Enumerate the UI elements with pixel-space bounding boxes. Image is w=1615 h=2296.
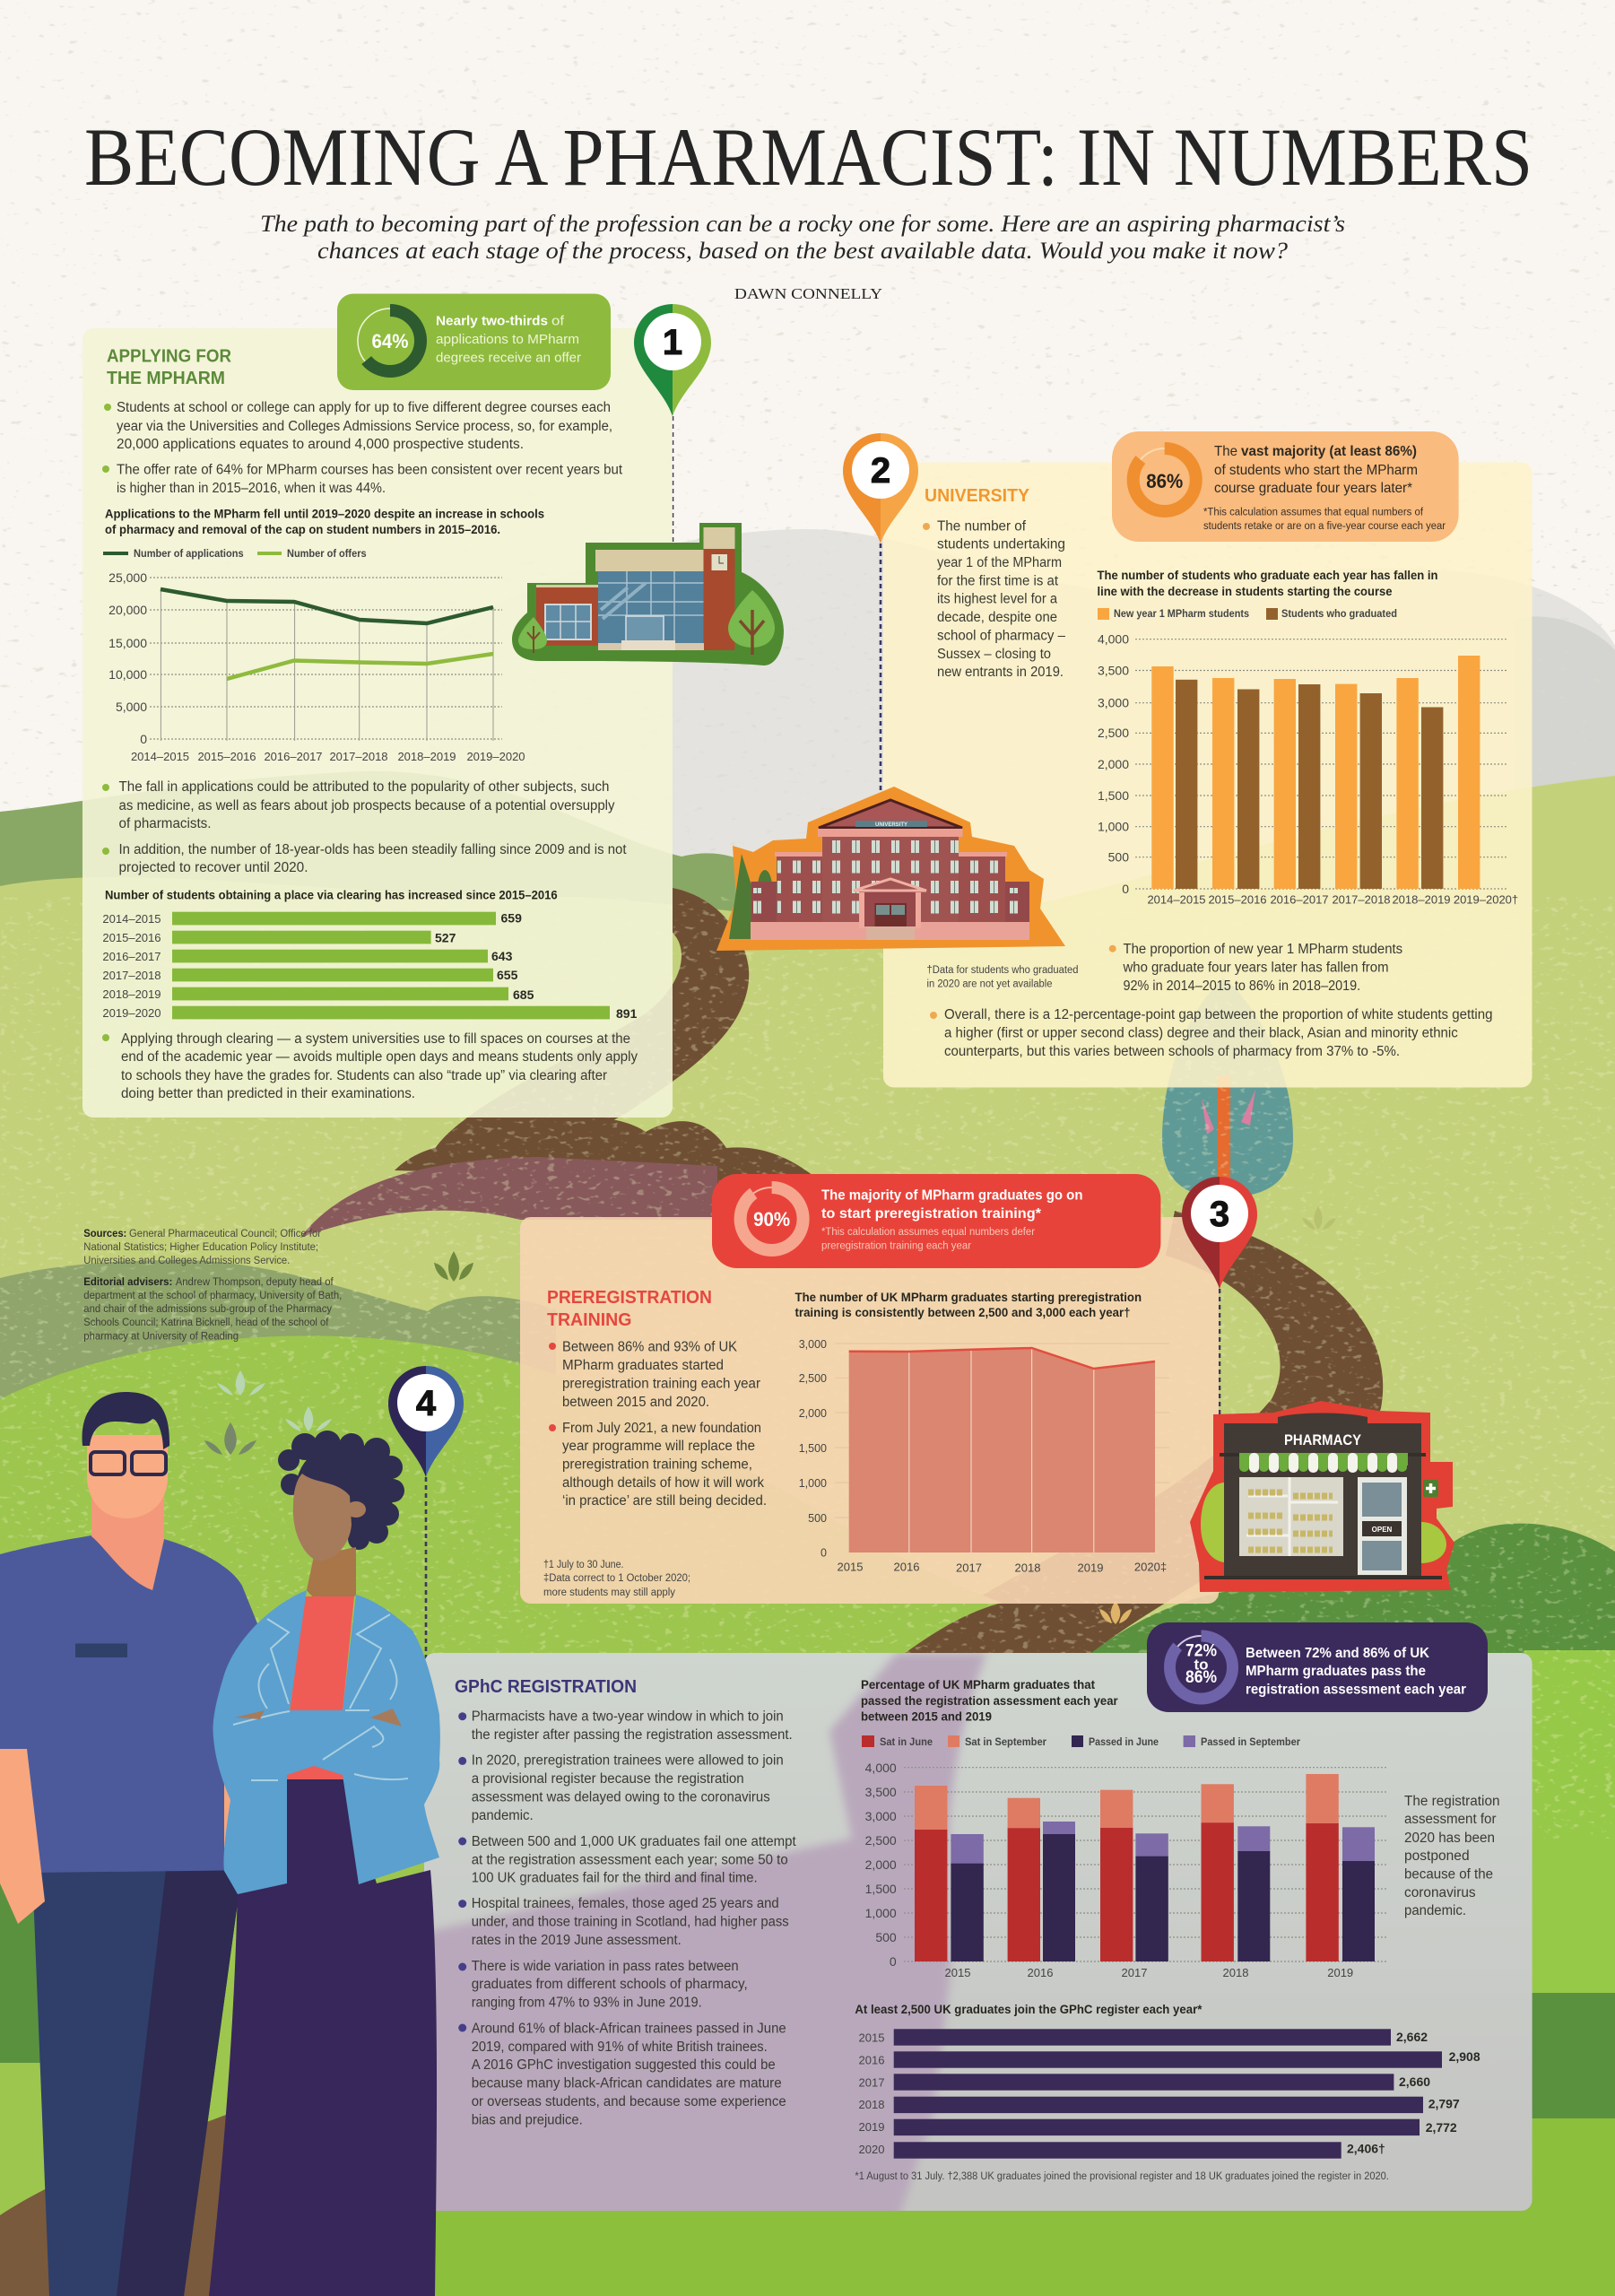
sources and editorial advisers: pharmacy at University of Reading [83, 1332, 239, 1343]
stacked bar chart: sat and passed: 2,000 [865, 1857, 897, 1872]
area chart: graduates starting preregistration: 2015 [838, 1561, 863, 1573]
bar chart: graduates joining register: 2020 [859, 2143, 884, 2156]
text block: registration bullets: A 2016 GPhC investigation suggested this could be [472, 2057, 776, 2073]
stacked bar chart: sat and passed: 3,500 [865, 1785, 897, 1799]
sources and editorial advisers: and chair of the admissions sub-group of the Pharmacy [83, 1304, 332, 1315]
bar chart: new students vs graduates: Students who graduated [1281, 609, 1397, 620]
heading: TRAINING [547, 1310, 631, 1330]
text block: registration bullets: Hospital trainees, females, those aged 25 years and [472, 1896, 779, 1911]
callout: 90% go on to preregistration: to start preregistration training* [821, 1206, 1042, 1222]
icon: pharmacy shop: OPEN [1372, 1526, 1393, 1534]
line chart: applications and offers: 25,000 [109, 570, 147, 585]
icon: university building [716, 787, 1065, 951]
bar chart: graduates joining register: 2018 [859, 2098, 884, 2111]
panel: applying for the MPharm [82, 328, 673, 1118]
bar chart: new students vs graduates: line with the decrease in students starting the course [1098, 585, 1393, 598]
bar chart: new students vs graduates: The number of students who graduate each year has fallen in [1098, 569, 1438, 582]
stacked bar chart: sat and passed: Passed in September [1201, 1737, 1300, 1748]
text block: preregistration bullets: between 2015 and 2020. [562, 1395, 709, 1410]
text block: number of students: its highest level for a [937, 592, 1057, 607]
icon: pharmacy shop [1190, 1401, 1454, 1592]
text block: preregistration bullets: From July 2021, a new foundation [562, 1421, 761, 1436]
callout: 90% go on to preregistration: *This calculation assumes equal numbers defer [821, 1227, 1035, 1238]
icon: university building: UNIVERSITY [875, 822, 907, 828]
text block: registration bullets: pandemic. [472, 1808, 534, 1823]
callout: 86% graduate: students retake or are on a five-year course each year [1203, 521, 1446, 532]
bar chart: clearing places: 2015–2016 [102, 931, 161, 944]
panel: GPhC registration [404, 1653, 1533, 2224]
line chart: applications and offers: 2018–2019 [397, 750, 456, 763]
footnote: data availability: in 2020 are not yet available [927, 979, 1053, 990]
line chart: applications and offers: 10,000 [109, 667, 147, 682]
text block: university lower bullets: who graduate four years later has fallen from [1123, 961, 1388, 976]
text block: middle bullets: projected to recover until 2020. [118, 860, 308, 875]
connector dotted lines [426, 416, 1220, 1659]
bar chart: new students vs graduates: 2018–2019 [1392, 893, 1451, 906]
text block: clearing bullet: doing better than predicted in their examinations. [121, 1086, 415, 1101]
stacked bar chart: sat and passed: 2015 [945, 1966, 970, 1979]
bar chart: clearing places: 655 [497, 968, 518, 982]
stacked bar chart: sat and passed: 4,000 [865, 1761, 897, 1775]
icon: map pin 2 [843, 433, 918, 544]
panel: preregistration training [520, 1217, 1219, 1604]
text block: university lower bullets [930, 942, 1492, 1059]
text block: number of students: The number of [937, 518, 1027, 534]
text block: registration bullets: Pharmacists have a two-year window in which to join [472, 1709, 784, 1725]
stacked bar chart: sat and passed: between 2015 and 2019 [861, 1710, 992, 1724]
heading [107, 346, 232, 388]
callout: 90% go on to preregistration: preregistration training each year [821, 1241, 971, 1252]
text block: clearing bullet: Applying through clearing — a system universities use to fill spaces on courses at the [121, 1031, 630, 1047]
bar chart: graduates joining register: 2015 [859, 2031, 884, 2045]
decorative leaves [204, 1206, 1336, 1624]
text block: registration bullets: Around 61% of black-African trainees passed in June [472, 2022, 786, 2036]
text block: university lower bullets: counterparts, but this varies between schools of pharmacy from 37% to -5%. [944, 1044, 1400, 1059]
text block: clearing bullet: end of the academic year — avoids multiple open days and means students only apply [121, 1049, 638, 1065]
text block: postponed note: pandemic. [1404, 1903, 1466, 1918]
callout: 86% graduate: course graduate four years later* [1214, 481, 1412, 496]
stacked bar chart: sat and passed: Sat in September [965, 1737, 1046, 1748]
icon: map pin 1: 1 [663, 323, 682, 362]
callout: 72% to 86% pass: registration assessment each year [1246, 1683, 1466, 1698]
line chart: applications and offers: 2016–2017 [264, 750, 323, 763]
text block: registration bullets: 2019, compared with 91% of white British trainees. [472, 2039, 768, 2055]
icon: faculty building [512, 523, 784, 665]
line chart: applications and offers: 5,000 [116, 700, 147, 714]
text block: registration bullets: rates in the 2019 June assessment. [472, 1933, 682, 1948]
text block: preregistration bullets: year programme will replace the [562, 1439, 755, 1454]
area chart: graduates starting preregistration: 2020‡ [1134, 1561, 1167, 1573]
stacked bar chart: sat and passed: 0 [890, 1954, 897, 1969]
area chart: graduates starting preregistration: 3,000 [799, 1338, 827, 1351]
callout: 64% of applications receive an offer: 64% [371, 330, 409, 352]
bar chart: new students vs graduates [1098, 569, 1518, 906]
area chart: graduates starting preregistration: 1,000 [799, 1477, 827, 1490]
bar chart: clearing places: 659 [500, 911, 522, 926]
stacked bar chart: sat and passed: 2018 [1223, 1966, 1248, 1979]
text block: middle bullets: as medicine, as well as fears about job prospects because of a potential oversupply [118, 798, 615, 813]
bar chart: new students vs graduates: 2014–2015 [1147, 893, 1206, 906]
bar chart: clearing places: 2014–2015 [102, 912, 161, 926]
line chart: applications and offers: Number of applications [134, 549, 244, 560]
line chart: applications and offers: of pharmacy and removal of the cap on student numbers in 2015–2016. [105, 523, 500, 536]
text block: number of students: year 1 of the MPharm [937, 555, 1062, 570]
callout: 86% graduate [1112, 431, 1459, 542]
text block: registration bullets [458, 1709, 796, 2127]
icon: map pin 4 [388, 1366, 464, 1477]
callout: 64% of applications receive an offer: Nearly two-thirds [436, 314, 548, 328]
text block: number of students: students undertaking [937, 537, 1065, 552]
callout: 72% to 86% pass: to [1194, 1657, 1209, 1674]
area chart: graduates starting preregistration: 2018 [1015, 1561, 1040, 1575]
area chart: graduates starting preregistration: 2016 [894, 1561, 919, 1573]
icon: map pin 3 [1182, 1177, 1257, 1289]
callout: 86% graduate: The [1214, 444, 1237, 459]
bar chart: new students vs graduates: 500 [1108, 850, 1129, 865]
callout: 64% of applications receive an offer: applications to MPharm [436, 333, 579, 347]
callout: 86% graduate: *This calculation assumes that equal numbers of [1203, 508, 1424, 518]
line chart: applications and offers: 20,000 [109, 603, 147, 617]
bar chart: clearing places [102, 888, 638, 1021]
sources and editorial advisers: department at the school of pharmacy, University of Bath, [83, 1291, 342, 1301]
callout: 90% go on to preregistration [712, 1174, 1160, 1268]
text block: middle bullets: The fall in applications could be attributed to the popularity of other subjects, such [118, 779, 610, 795]
text block: clearing bullet: to schools they have the grades for. Students can also “trade up” via clearing after [121, 1068, 607, 1083]
text block: number of students: new entrants in 2019. [937, 665, 1064, 680]
text block: preregistration bullets: preregistration training each year [562, 1377, 760, 1392]
callout: 72% to 86% pass: MPharm graduates pass the [1246, 1664, 1426, 1679]
area chart: graduates starting preregistration: 2,500 [799, 1372, 827, 1385]
stacked bar chart: sat and passed: 1,500 [865, 1882, 897, 1896]
stacked bar chart: sat and passed: Percentage of UK MPharm graduates that [861, 1678, 1095, 1692]
text block: registration bullets: the register after passing the registration assessment. [472, 1727, 793, 1743]
text block: number of students: Sussex – closing to [937, 647, 1051, 662]
byline: DAWN CONNELLY [734, 285, 882, 302]
bar chart: graduates joining register: 2019 [859, 2120, 884, 2134]
icon: pharmacy shop: PHARMACY [1284, 1431, 1362, 1448]
footnote: data availability: †Data for students who graduated [927, 965, 1078, 976]
bar chart: new students vs graduates: 3,500 [1098, 664, 1129, 678]
text block: preregistration bullets: although details of how it will work [562, 1475, 764, 1491]
area chart: graduates starting preregistration [794, 1291, 1169, 1575]
bar chart: graduates joining register: 2,662 [1396, 2030, 1428, 2044]
sources and editorial advisers: Sources: [83, 1229, 126, 1239]
text block: first bullets: year via the Universities and Colleges Admissions Service process, so, for example, [117, 419, 612, 434]
sources and editorial advisers: General Pharmaceutical Council; Office for [129, 1229, 321, 1239]
callout: 72% to 86% pass: 72% [1185, 1642, 1217, 1661]
text block: registration bullets: graduates from different schools of pharmacy, [472, 1977, 748, 1992]
text block: registration bullets: Between 500 and 1,000 UK graduates fail one attempt [472, 1834, 796, 1849]
bar chart: new students vs graduates: 2,000 [1098, 757, 1129, 771]
text block: preregistration bullets: Between 86% and 93% of UK [562, 1340, 738, 1355]
text block: registration bullets: a provisional register because the registration [472, 1771, 744, 1787]
text block: preregistration bullets: ‘in practice’ are still being decided. [562, 1493, 767, 1509]
area chart: graduates starting preregistration: training is consistently between 2,500 and 3,000 each year† [794, 1306, 1130, 1319]
bar chart: clearing places: 2019–2020 [102, 1006, 161, 1020]
sources and editorial advisers: Andrew Thompson, deputy head of [176, 1277, 334, 1288]
text block: registration bullets: In 2020, preregistration trainees were allowed to join [472, 1753, 784, 1769]
text block: registration bullets: ranging from 47% to 93% in June 2019. [472, 1995, 702, 2010]
text block: university lower bullets: The proportion of new year 1 MPharm students [1123, 942, 1402, 957]
line chart: applications and offers: 0 [140, 732, 147, 746]
callout: 64% of applications receive an offer: of [551, 314, 565, 328]
text block: registration bullets: assessment was delayed owing to the coronavirus [472, 1790, 770, 1805]
text block: middle bullets: of pharmacists. [118, 816, 212, 831]
line chart: applications and offers: Applications to the MPharm fell until 2019–2020 despite an increase in schools [105, 508, 544, 520]
text block: postponed note: coronavirus [1404, 1885, 1476, 1900]
heading: THE MPHARM [107, 369, 225, 388]
line chart: applications and offers: 15,000 [109, 636, 147, 650]
bar chart: clearing places: 527 [435, 931, 456, 945]
stacked bar chart: sat and passed: Sat in June [880, 1737, 933, 1748]
icon: map pin 2: 2 [871, 451, 890, 491]
stacked bar chart: sat and passed: 3,000 [865, 1809, 897, 1823]
text block: university lower bullets: Overall, there is a 12-percentage-point gap between the proportion of white students getting [944, 1007, 1492, 1022]
intro text: chances at each stage of the process, based on the best available data. Would you make it now? [317, 238, 1288, 264]
text block: university lower bullets: 92% in 2014–2015 to 86% in 2018–2019. [1123, 978, 1360, 994]
callout: 90% go on to preregistration: The majority of MPharm graduates go on [821, 1188, 1083, 1204]
bar chart: graduates joining register: 2,406† [1347, 2142, 1385, 2156]
bar chart: new students vs graduates: 1,500 [1098, 788, 1129, 803]
text block: preregistration bullets [549, 1340, 767, 1509]
line chart: applications and offers [103, 508, 544, 763]
footnote: data availability [927, 965, 1078, 990]
line chart: applications and offers: Number of offers [287, 549, 367, 560]
area chart: graduates starting preregistration: 2,000 [799, 1407, 827, 1420]
bar chart: new students vs graduates: 2015–2016 [1208, 893, 1267, 906]
line chart: applications and offers: 2017–2018 [329, 750, 388, 763]
sources and editorial advisers: Universities and Colleges Admissions Service. [83, 1256, 290, 1266]
text block: preregistration bullets: preregistration training scheme, [562, 1457, 752, 1473]
text block: first bullets: 20,000 applications equates to around 4,000 prospective students. [117, 437, 524, 452]
text block: registration bullets: at the registration assessment each year; some 50 to [472, 1853, 788, 1868]
text block: postponed note: The registration [1404, 1794, 1499, 1809]
intro text: The path to becoming part of the profession can be a rocky one for some. Here are an aspiring pharmacist’s [260, 211, 1345, 237]
text block: number of students [923, 518, 1065, 680]
heading: UNIVERSITY [925, 486, 1030, 506]
bar chart: graduates joining register: 2,772 [1426, 2120, 1457, 2135]
text block: first bullets: Students at school or college can apply for up to five different degree courses each [117, 400, 611, 415]
line chart: applications and offers: 2014–2015 [131, 750, 189, 763]
text block: preregistration bullets: MPharm graduates started [562, 1358, 724, 1373]
intro text [260, 211, 1345, 264]
text block: postponed note: postponed [1404, 1848, 1470, 1864]
footnotes: more students may still apply [543, 1587, 675, 1598]
bar chart: graduates joining register: At least 2,500 UK graduates join the GPhC register each year* [855, 2003, 1203, 2016]
bar chart: clearing places: 2018–2019 [102, 987, 161, 1001]
heading: APPLYING FOR [107, 346, 232, 366]
callout: 90% go on to preregistration: 90% [753, 1208, 790, 1231]
text block: registration bullets: There is wide variation in pass rates between [472, 1959, 739, 1974]
text block: postponed note: 2020 has been [1404, 1831, 1495, 1846]
bar chart: graduates joining register: 2017 [859, 2076, 884, 2090]
bar chart: new students vs graduates: 0 [1122, 882, 1129, 896]
sources and editorial advisers: Schools Council; Katrina Bicknell, head of the school of [83, 1318, 329, 1328]
text block: postponed note [1404, 1794, 1499, 1918]
bar chart: new students vs graduates: 2019–2020† [1454, 893, 1518, 906]
text block: postponed note: assessment for [1404, 1812, 1496, 1827]
bar chart: clearing places: 685 [513, 987, 534, 1002]
text block: clearing bullet [102, 1031, 638, 1101]
area chart: graduates starting preregistration: 2019 [1078, 1561, 1103, 1575]
area chart: graduates starting preregistration: The number of UK MPharm graduates starting preregistration [794, 1291, 1142, 1304]
text block: middle bullets: In addition, the number of 18-year-olds has been steadily falling since 2009 and is not [118, 842, 627, 857]
stacked bar chart: sat and passed: 1,000 [865, 1906, 897, 1920]
bar chart: graduates joining register: 2016 [859, 2054, 884, 2067]
heading: PREREGISTRATION [547, 1288, 712, 1308]
heading [547, 1288, 712, 1330]
stacked bar chart: sat and passed: Passed in June [1089, 1737, 1159, 1748]
area chart: graduates starting preregistration: 0 [821, 1546, 827, 1559]
stacked bar chart: sat and passed: 2016 [1028, 1966, 1053, 1979]
heading: GPhC REGISTRATION [455, 1677, 637, 1697]
callout: 72% to 86% pass: Between 72% and 86% of UK [1246, 1646, 1430, 1661]
bar chart: new students vs graduates: 4,000 [1098, 631, 1129, 646]
sources and editorial advisers: Editorial advisers: [83, 1277, 172, 1288]
bar chart: graduates joining register: 2,797 [1428, 2097, 1460, 2111]
bar chart: new students vs graduates: 2017–2018 [1332, 893, 1391, 906]
area chart: graduates starting preregistration: 2017 [956, 1561, 982, 1575]
icon: map pin 4: 4 [416, 1384, 437, 1423]
text block: registration bullets: bias and prejudice. [472, 2112, 583, 2127]
callout: 72% to 86% pass: 86% [1185, 1668, 1217, 1687]
footnote: register data: *1 August to 31 July. †2,388 UK graduates joined the provisional register and 18 UK graduates joined the register in 2020. [855, 2171, 1389, 2182]
bar chart: new students vs graduates: 3,000 [1098, 696, 1129, 710]
stacked bar chart: sat and passed: passed the registration assessment each year [861, 1694, 1118, 1708]
text block: postponed note: because of the [1404, 1867, 1493, 1883]
text block: number of students: for the first time is at [937, 573, 1059, 588]
panel: university [883, 463, 1532, 1087]
bar chart: graduates joining register [855, 2003, 1480, 2159]
bar chart: new students vs graduates: New year 1 MPharm students [1114, 609, 1249, 620]
area chart: graduates starting preregistration: 1,500 [799, 1442, 827, 1455]
bar chart: new students vs graduates: 2,500 [1098, 726, 1129, 740]
callout: 64% of applications receive an offer [337, 294, 611, 390]
text block: first bullets: The offer rate of 64% for MPharm courses has been consistent over recent years but [117, 463, 623, 477]
line chart: applications and offers: 2019–2020 [466, 750, 525, 763]
footnotes: †1 July to 30 June. [543, 1560, 624, 1570]
footnotes: ‡Data correct to 1 October 2020; [543, 1573, 690, 1584]
footnotes [543, 1560, 690, 1598]
callout: 86% graduate: of students who start the MPharm [1214, 463, 1418, 478]
icon: map pin 1 [634, 304, 711, 416]
stacked bar chart: sat and passed: 2017 [1122, 1966, 1147, 1979]
text block: registration bullets: under, and those training in Scotland, had higher pass [472, 1914, 789, 1930]
stacked bar chart: sat and passed: 2,500 [865, 1833, 897, 1848]
bar chart: clearing places: 2017–2018 [102, 969, 161, 982]
bar chart: new students vs graduates: 2016–2017 [1270, 893, 1329, 906]
text block: registration bullets: because many black-African candidates are mature [472, 2076, 782, 2092]
callout: 64% of applications receive an offer: degrees receive an offer [436, 352, 581, 366]
text block: middle bullets [102, 779, 627, 875]
sources and editorial advisers: National Statistics; Higher Education Policy Institute; [83, 1242, 318, 1253]
icon: map pin 3: 3 [1210, 1195, 1229, 1234]
text block: first bullets [102, 400, 623, 496]
text block: registration bullets: 100 UK graduates fail for the third and final time. [472, 1871, 758, 1885]
illustration: male pharmacist [0, 1392, 265, 2296]
text block: number of students: school of pharmacy – [937, 628, 1065, 643]
bar chart: clearing places: 2016–2017 [102, 950, 161, 963]
bar chart: clearing places: Number of students obtaining a place via clearing has increased since 2015–2016 [105, 888, 558, 902]
line chart: applications and offers: 2015–2016 [197, 750, 256, 763]
bar chart: clearing places: 891 [616, 1006, 638, 1021]
sources and editorial advisers [83, 1229, 342, 1343]
text block: university lower bullets: a higher (first or upper second class) degree and their black, Asian and minority ethnic [944, 1026, 1458, 1041]
stacked bar chart: sat and passed: 2019 [1327, 1966, 1353, 1979]
stacked bar chart: sat and passed: 500 [875, 1930, 897, 1944]
callout: 86% graduate: vast majority (at least 86%) [1241, 444, 1417, 459]
text block: first bullets: is higher than in 2015–2016, when it was 44%. [117, 481, 386, 496]
text block: number of students: decade, despite one [937, 610, 1057, 625]
stacked bar chart: sat and passed [861, 1678, 1386, 1979]
bar chart: clearing places: 643 [491, 949, 513, 963]
callout: 72% to 86% pass [1147, 1622, 1488, 1712]
callout: 86% graduate: 86% [1146, 470, 1183, 492]
area chart: graduates starting preregistration: 500 [808, 1512, 827, 1525]
illustration: female pharmacist [209, 1431, 440, 2296]
bar chart: graduates joining register: 2,908 [1449, 2049, 1480, 2064]
bar chart: graduates joining register: 2,660 [1399, 2074, 1430, 2089]
text block: registration bullets: or overseas students, and because some experience [472, 2094, 786, 2109]
bar chart: new students vs graduates: 1,000 [1098, 820, 1129, 834]
